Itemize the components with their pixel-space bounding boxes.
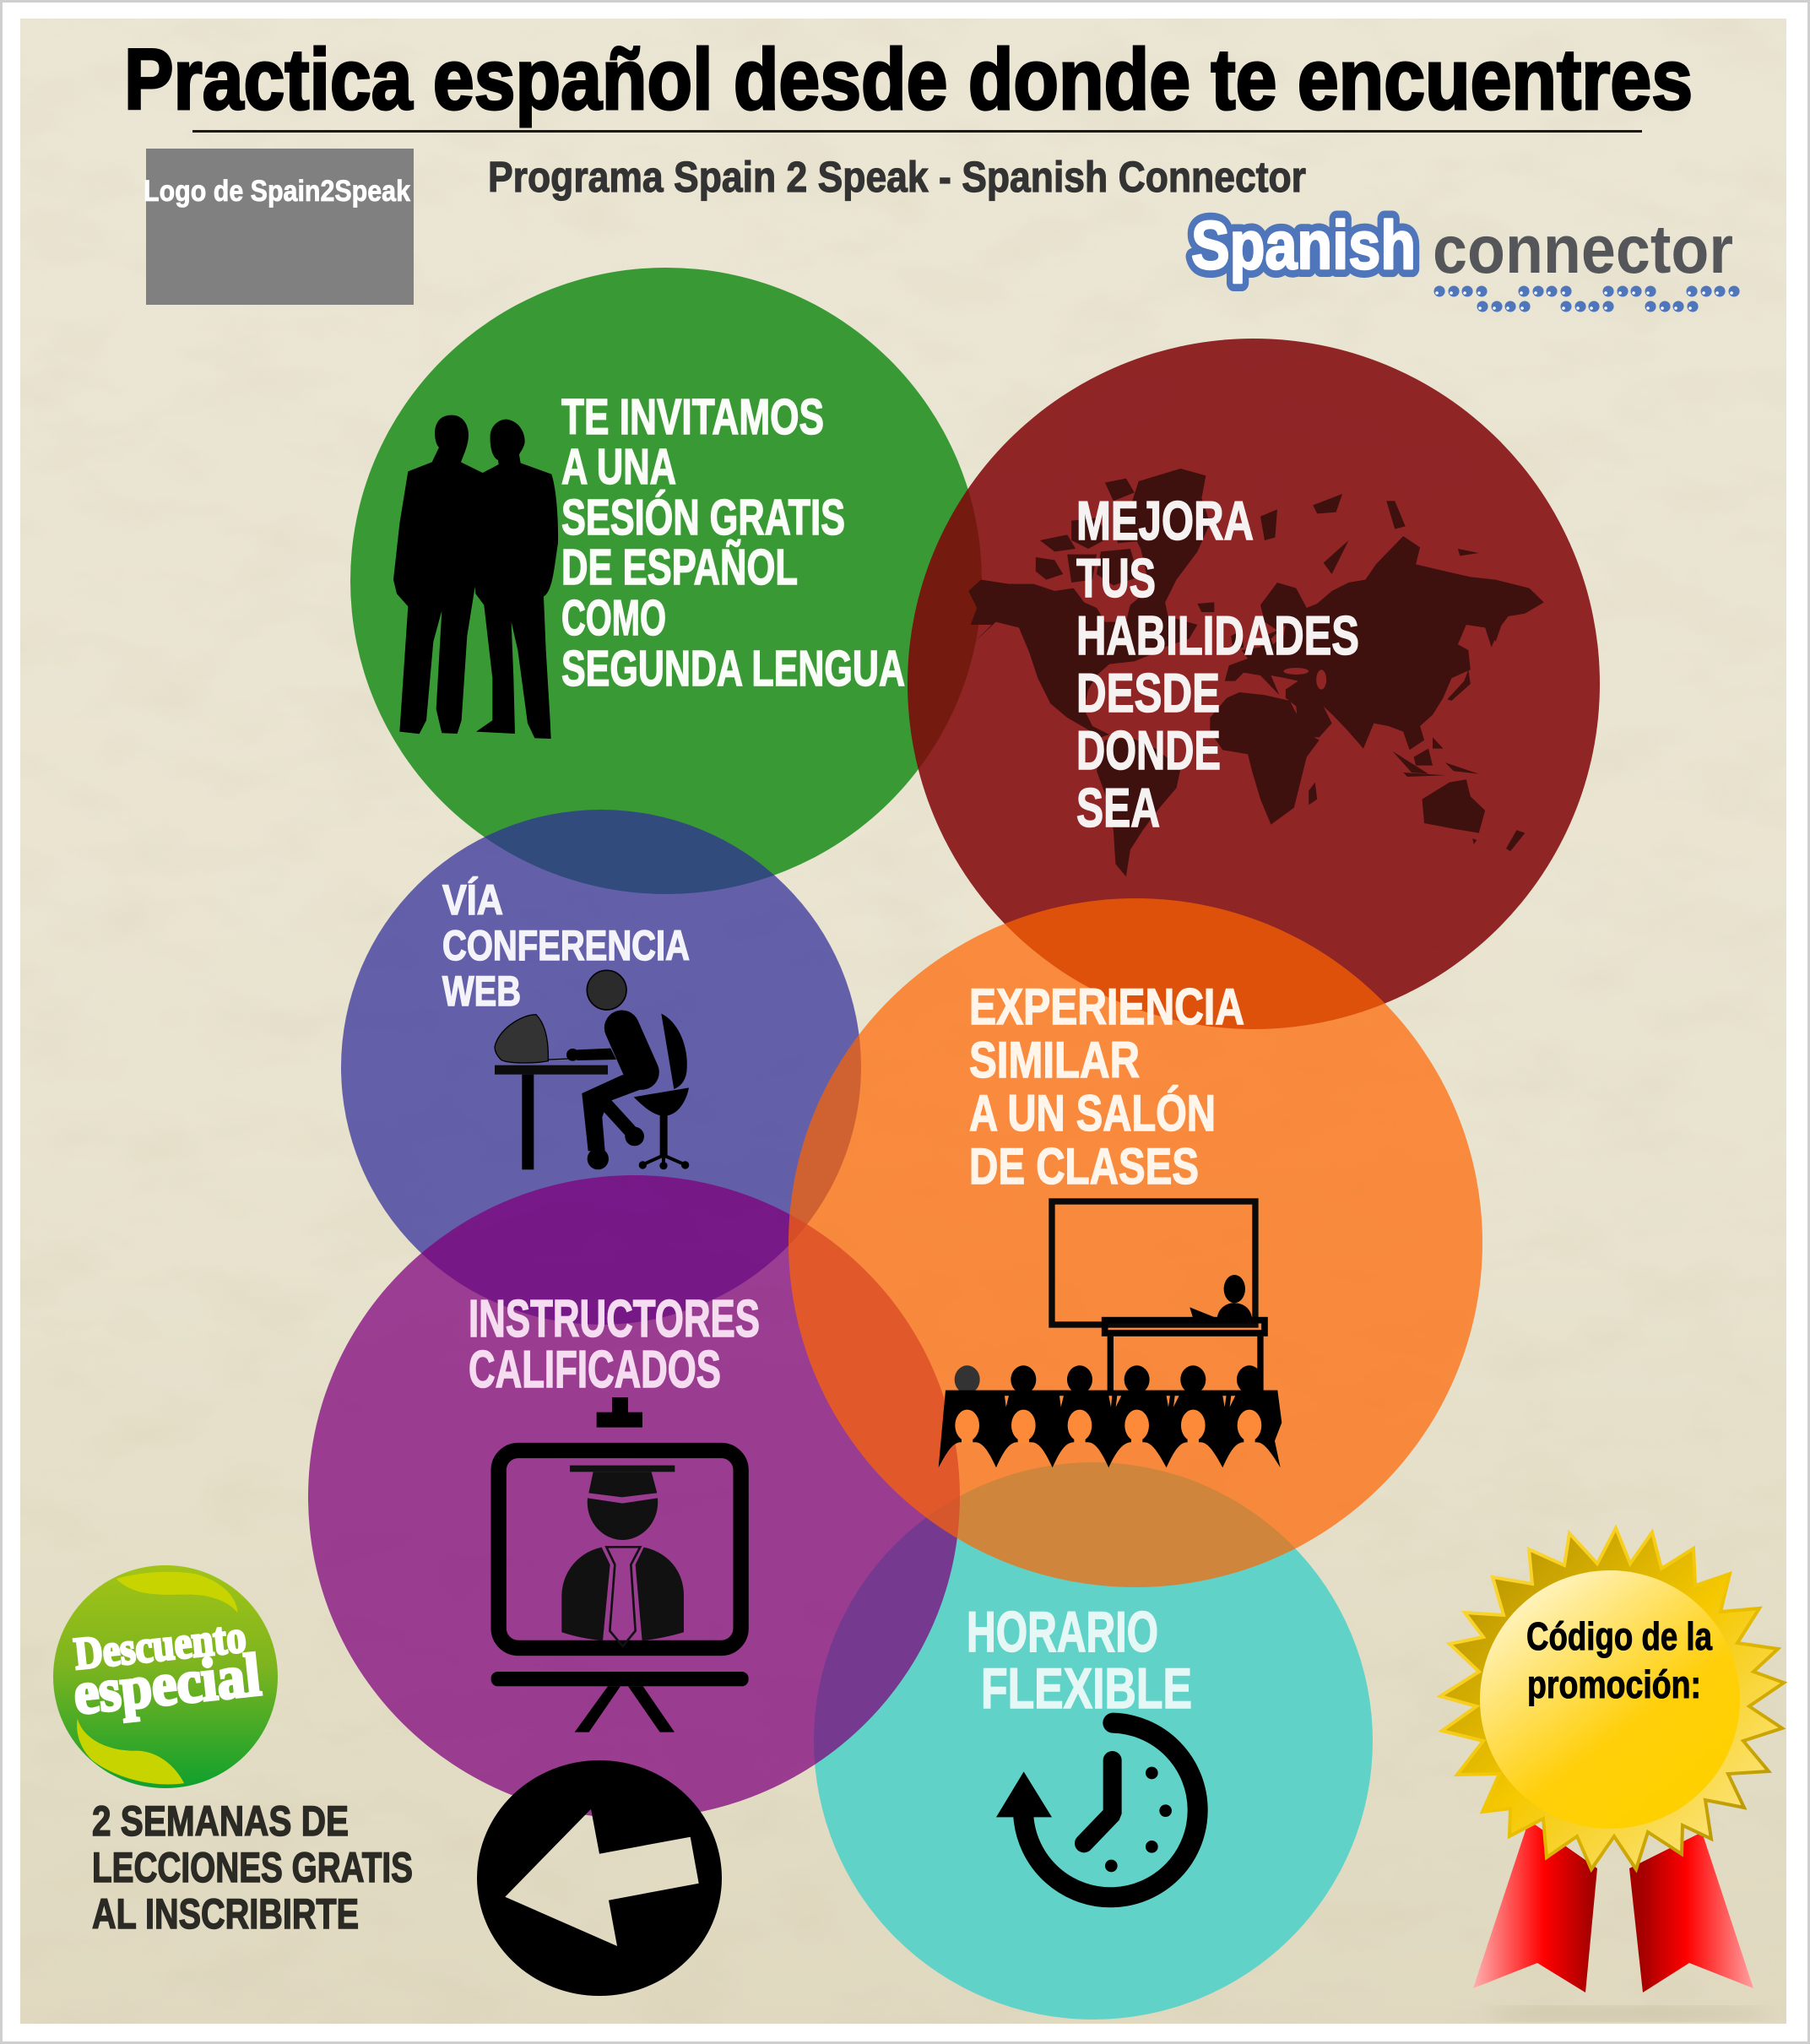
text: free session invitation: A UNA	[561, 439, 676, 495]
badge text: especial: especial	[70, 1640, 263, 1727]
medal text	[1526, 1614, 1712, 1706]
icon: world map	[968, 469, 1544, 876]
text: free session invitation: SEGUNDA LENGUA	[561, 641, 905, 697]
text: via web conference: CONFERENCIA	[442, 922, 690, 969]
text: two free weeks: LECCIONES GRATIS	[92, 1844, 413, 1891]
text: classroom experience	[969, 979, 1244, 1195]
text: qualified instructors: CALIFICADOS	[469, 1341, 721, 1399]
blue circle	[341, 810, 861, 1325]
text: improve your skills: SEA	[1076, 777, 1160, 838]
text: classroom experience: DE CLASES	[969, 1138, 1199, 1195]
title underline	[192, 130, 1642, 133]
panel: purple circle, qualified instructors	[308, 1175, 960, 1819]
text: improve your skills: DONDE	[1076, 719, 1221, 781]
text: flexible schedule: FLEXIBLE	[981, 1656, 1192, 1721]
logo word: Spanish fill: Spanish	[1191, 208, 1416, 284]
text: improve your skills: TUS	[1076, 547, 1156, 609]
text: free session invitation: TE INVITAMOS	[561, 389, 824, 445]
text: free session invitation: SESIÓN GRATIS	[561, 490, 845, 545]
red circle	[908, 339, 1600, 1029]
panel: red circle, world map	[908, 339, 1600, 1029]
text: via web conference: VÍA	[442, 876, 503, 924]
discount badge	[53, 1565, 278, 1788]
text: free session invitation: DE ESPAÑOL	[561, 539, 798, 595]
logo dots	[1437, 291, 1734, 308]
green circle	[350, 268, 982, 894]
text: flexible schedule	[967, 1600, 1192, 1721]
text: improve your skills: DESDE	[1076, 662, 1220, 724]
text: free session invitation	[561, 389, 905, 697]
medal ribbons	[1473, 1820, 1753, 1992]
subtitle: Programa Spain 2 Speak - Spanish Connector	[488, 153, 1306, 201]
text: two free weeks: 2 SEMANAS DE	[92, 1797, 349, 1845]
panel: teal circle, flexible schedule	[814, 1462, 1373, 2020]
icon: person at computer	[495, 970, 689, 1169]
icon: graduate on screen	[491, 1397, 749, 1732]
text: via web conference: WEB	[442, 968, 521, 1015]
text: qualified instructors: INSTRUCTORES	[469, 1290, 760, 1348]
logo word: connector: connector	[1433, 212, 1733, 288]
medal	[1440, 1528, 1784, 1992]
text: two free weeks: AL INSCRIBIRTE	[92, 1890, 359, 1938]
logo: Spanish connector	[1191, 208, 1734, 308]
medal text: promoción:	[1527, 1662, 1701, 1706]
purple circle	[308, 1175, 960, 1819]
text: flexible schedule: HORARIO	[967, 1600, 1158, 1664]
logo placeholder: Spain2Speak	[144, 149, 414, 305]
text: free session invitation: COMO	[561, 590, 666, 646]
medal star	[1440, 1528, 1784, 1869]
badge text: descuento: Descuento	[72, 1611, 248, 1679]
panel: blue circle, web conference	[341, 810, 861, 1325]
text: classroom experience: EXPERIENCIA	[969, 979, 1244, 1035]
text: classroom experience: A UN SALÓN	[969, 1085, 1216, 1141]
text: improve your skills: MEJORA	[1076, 490, 1254, 551]
logo word: Spanish outline: Spanish	[1191, 208, 1416, 284]
text: qualified instructors	[469, 1290, 760, 1399]
teal circle	[814, 1462, 1373, 2020]
badge disc	[53, 1565, 278, 1788]
icon: two men silhouette	[393, 415, 558, 739]
medal text: Código de la	[1526, 1614, 1712, 1658]
badge leaves	[77, 1572, 237, 1784]
text: two free weeks	[92, 1797, 413, 1938]
logo placeholder: Spain2Speak: Logo de Spain2Speak	[144, 175, 410, 208]
icon: classroom	[939, 1201, 1282, 1467]
text: via web conference	[442, 876, 690, 1015]
icon: clock with arrow	[996, 1723, 1198, 1897]
medal disc	[1480, 1570, 1740, 1829]
text: classroom experience: SIMILAR	[969, 1032, 1140, 1088]
arrow: black circle pointing left	[477, 1760, 722, 1996]
panel: orange circle, classroom experience	[788, 898, 1482, 1587]
panel: green circle, free session	[350, 268, 982, 894]
orange circle	[788, 898, 1482, 1587]
text: improve your skills	[1076, 490, 1359, 838]
text: improve your skills: HABILIDADES	[1076, 605, 1359, 666]
